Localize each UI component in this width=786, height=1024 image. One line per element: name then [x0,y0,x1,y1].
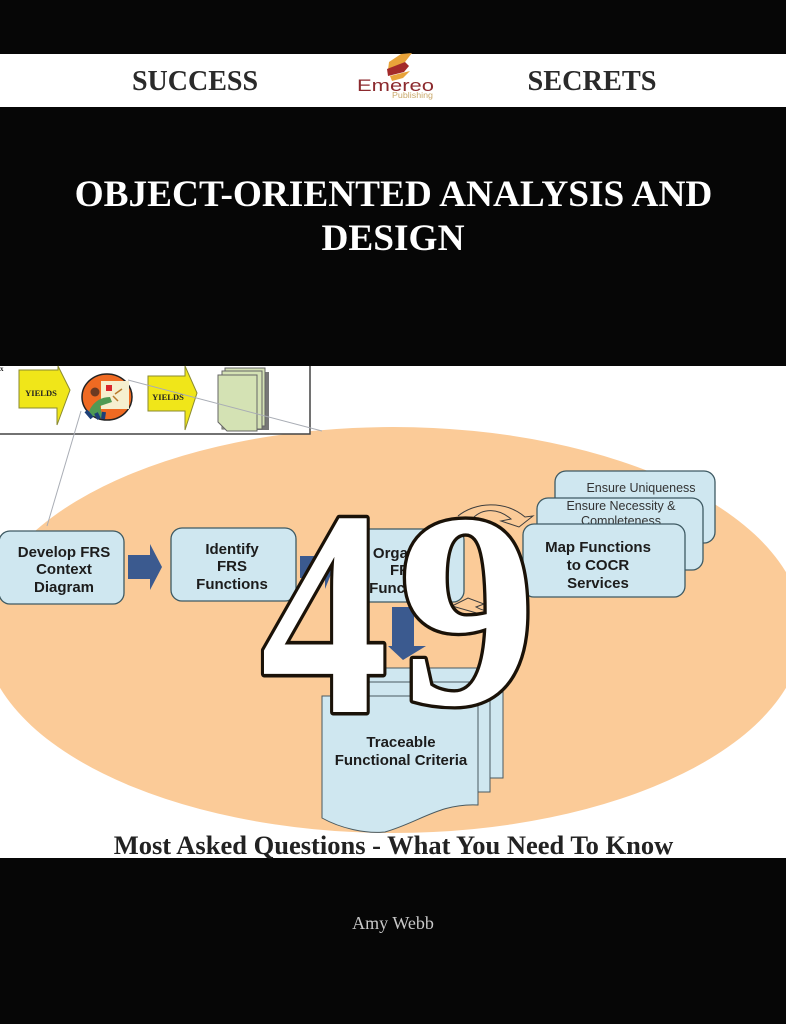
box: map functions to COCR services: Map Functions [545,539,651,556]
title [75,174,712,259]
curved arrow top [458,505,533,527]
box: identify FRS functions: FRS [217,558,247,575]
arrow: organize to criteria [388,607,426,660]
box: identify FRS functions: Functions [196,576,268,593]
large number 49: 4 [260,450,388,776]
author: Amy Webb [352,913,434,933]
curved arrow bottom [452,598,528,616]
orange ellipse [0,427,786,833]
box: develop FRS context diagram: Develop FRS [18,544,110,561]
title: OBJECT-ORIENTED ANALYSIS AND [75,174,712,215]
box: identify FRS functions: Identify [205,541,259,558]
subtitle: Most Asked Questions - What You Need To Know [114,830,673,860]
document stack: traceable functional criteria: Functional Criteria [335,752,468,769]
large number 49: 9 [398,457,536,764]
box: organize FRS functions: Functions [369,580,441,597]
publisher logo: Emereo [357,76,434,95]
box: develop FRS context diagram: Context [36,561,92,578]
box: organize FRS functions [345,529,464,602]
cover diagram panel [0,365,786,858]
strip corner mark: x [0,365,4,373]
box: ensure uniqueness [555,471,715,543]
title: DESIGN [321,218,465,259]
box: map functions to COCR services: to COCR [567,557,629,574]
box: organize FRS functions: Organize [373,545,437,562]
header word: secrets: SECRETS [528,66,656,97]
box: map functions to COCR services [523,524,685,597]
document stack icon [218,368,269,431]
arrow: develop to identify [128,544,162,590]
box: ensure necessity and completeness: Completeness [581,514,661,528]
box: ensure necessity and completeness: Ensure Necessity & [566,499,676,513]
white header band [0,53,786,107]
header word: success: SUCCESS [132,66,258,97]
document stack: traceable functional criteria [322,668,503,832]
publisher logo [357,53,434,100]
box: identify FRS functions [171,528,296,601]
box: ensure uniqueness: Ensure Uniqueness [586,481,696,495]
box: map functions to COCR services: Services [567,575,629,592]
yields arrow 1 [19,366,70,425]
box: develop FRS context diagram: Diagram [34,579,94,596]
box: organize FRS functions: FRS [390,562,420,579]
publisher logo: Publishing [392,91,433,100]
yields arrow 1: YIELDS [25,388,57,398]
box: ensure necessity and completeness [537,498,703,570]
arrow: identify to organize [300,545,334,589]
box: develop FRS context diagram [0,531,124,604]
yields arrow 2 [148,366,197,430]
yields arrow 2: YIELDS [152,392,184,402]
large number 49 [260,450,536,776]
document stack: traceable functional criteria: Traceable [366,734,436,751]
yields strip [0,365,322,526]
dotted connector lines [47,380,322,526]
meeting icon [82,374,132,420]
